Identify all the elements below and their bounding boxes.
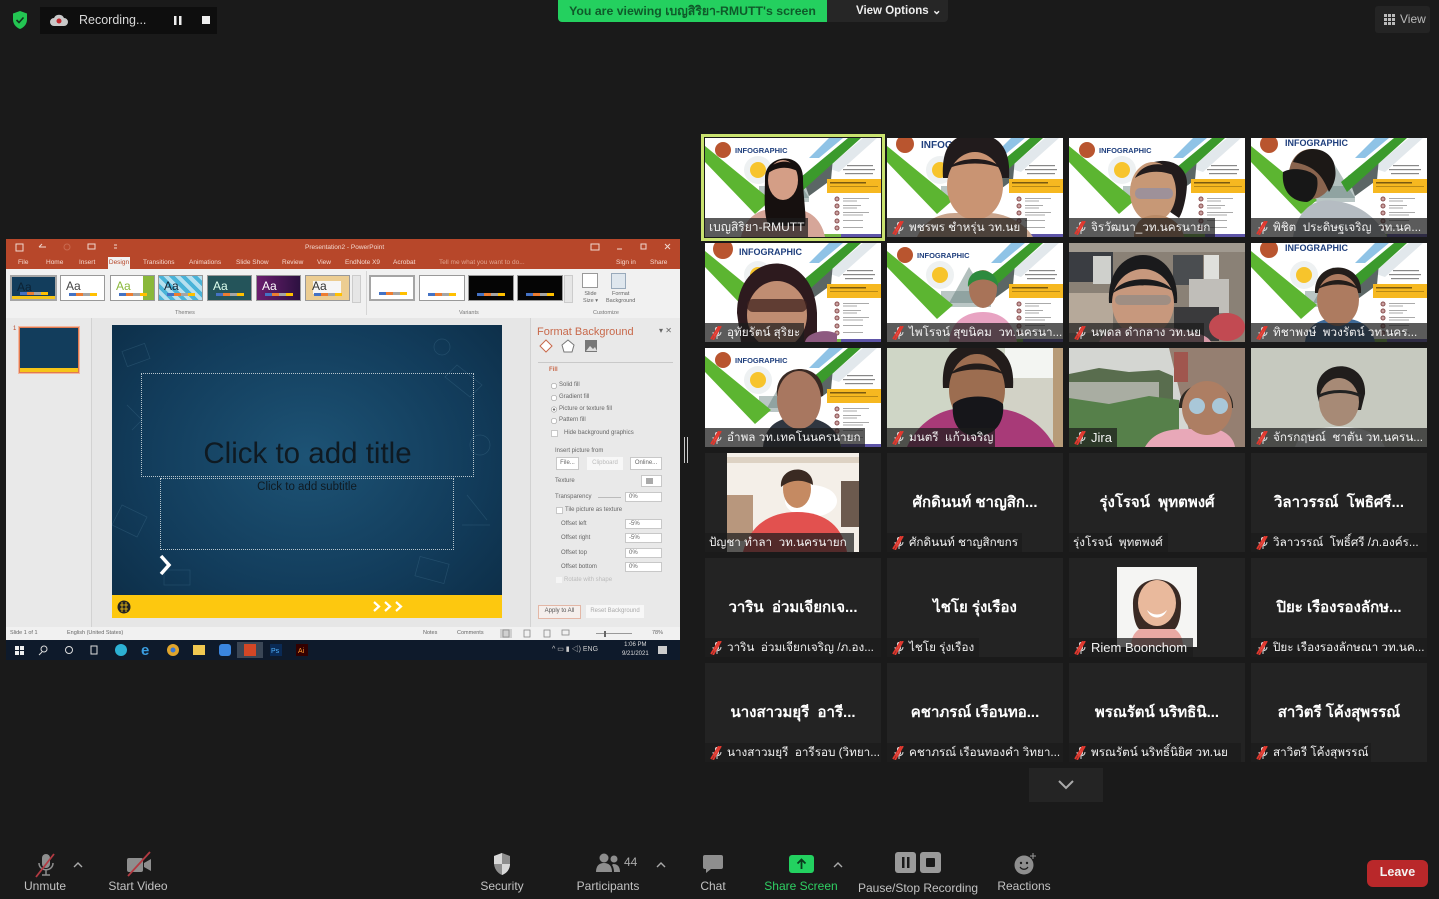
tab labels: Tell me what you want to do... xyxy=(439,259,525,266)
chevron up xyxy=(833,861,843,868)
participant name: วิลาวรรณ์ โพธิศรี... xyxy=(1274,494,1404,511)
active speaker highlight xyxy=(701,134,885,241)
recording label: Recording... xyxy=(79,13,146,27)
toolbar: start video xyxy=(100,848,180,896)
name tag: Jira xyxy=(1091,430,1112,445)
video feed xyxy=(887,138,1063,237)
status bar: Comments xyxy=(457,630,484,636)
insert picture label: Insert picture from xyxy=(555,448,603,454)
rotate with shape: Rotate with shape xyxy=(564,577,612,583)
insert file button: File... xyxy=(560,460,575,466)
theme thumbnail 1: Aa xyxy=(17,280,32,294)
video feed xyxy=(887,243,1063,342)
name tag xyxy=(705,638,881,657)
video tile: จิรวัฒนา xyxy=(1069,138,1245,237)
splitter handle xyxy=(684,437,688,463)
video feed: INFOGRAPHIC xyxy=(1285,138,1349,148)
language: English (United States) xyxy=(67,630,123,636)
name tag: เบญสิริยา-RMUTT xyxy=(709,220,804,234)
theme thumbnail 6 xyxy=(256,275,301,301)
offset rows: Offset top xyxy=(561,550,587,556)
participant name: คชาภรณ์ เรือนทอ... xyxy=(911,704,1039,721)
name tag xyxy=(705,533,854,552)
rotate checkbox xyxy=(556,577,562,583)
name tag xyxy=(887,638,979,657)
tab labels: Share xyxy=(650,259,667,266)
theme thumbnail 3: Aa xyxy=(116,279,131,293)
offset rows: -5% xyxy=(629,521,640,527)
chevron arrow xyxy=(160,554,172,576)
name tag: จักรกฤษณ์ ชาตัน วท.นครน... xyxy=(1273,431,1423,444)
offset rows: 0% xyxy=(629,550,638,556)
name tag: วิลาวรรณ์ โพธิ์ศรี /ภ.องค์ร... xyxy=(1273,536,1419,549)
name tag: ทิชาพงษ์ พวงรัตน์ วท.นคร... xyxy=(1273,326,1417,339)
participant name: นางสาวมยุรี อารี... xyxy=(730,704,856,721)
video tile: ทิชาพงษ์ xyxy=(1251,243,1427,342)
icon: format background xyxy=(611,273,626,289)
view options button xyxy=(827,0,948,22)
insert file button xyxy=(556,457,579,470)
clipboard button xyxy=(587,457,623,470)
tray clock: 1:06 PM xyxy=(624,642,647,648)
offset rows: Offset right xyxy=(561,535,590,541)
slide canvas xyxy=(112,325,502,618)
tab labels: Acrobat xyxy=(393,259,415,266)
hide background label: Hide background graphics xyxy=(564,430,634,436)
name tag: มนตรี แก้วเจริญ xyxy=(909,431,993,444)
reset background button xyxy=(586,605,644,618)
icon: shield xyxy=(492,852,512,876)
name tag: จิรวัฒนา_วท.นครนายก xyxy=(1091,221,1210,234)
offset rows xyxy=(561,519,662,572)
video feed xyxy=(727,453,859,552)
Variants label: Variants xyxy=(459,310,479,316)
viewing banner: You are viewing เบญสิริยา-RMUTT's screen xyxy=(569,4,816,18)
video tile: อุทัยรัตน์ xyxy=(705,243,881,342)
name tag: พชรพร ชำหรุ่น วท.นย xyxy=(909,221,1020,234)
video tile: พชรพร xyxy=(887,138,1063,237)
video tile: ศักดินนท์ xyxy=(887,453,1063,552)
fill options: Pattern fill xyxy=(559,417,586,423)
ribbon xyxy=(6,269,680,318)
video tile: เบญสิริยา xyxy=(705,138,881,237)
video tile: ไชโย xyxy=(887,558,1063,657)
reactions label: Reactions xyxy=(997,879,1051,893)
name tag: ปัญชา ทำลา วท.นครนายก xyxy=(709,536,847,549)
participant name: ปิยะ เรืองรองลักษ... xyxy=(1276,599,1402,616)
pane divider xyxy=(538,362,673,363)
leave button: Leave xyxy=(1380,865,1415,879)
toolbar: chat xyxy=(690,848,736,896)
top bar: security shield xyxy=(13,11,27,29)
name tag xyxy=(1069,743,1241,762)
video tile: สาวิตรี xyxy=(1251,663,1427,762)
zoom slider xyxy=(596,633,632,634)
video tile: Jira xyxy=(1069,348,1245,447)
participant name: ไชโย รุ่งเรือง xyxy=(933,599,1017,616)
video feed xyxy=(1295,366,1385,447)
variant thumbnail 1 xyxy=(369,275,415,301)
format background label xyxy=(606,291,635,304)
reset background button: Reset Background xyxy=(590,608,640,614)
notifications icon xyxy=(658,646,667,654)
name tag xyxy=(1251,428,1427,447)
video feed: INFOGRAPHIC xyxy=(735,146,788,155)
themes scroll control xyxy=(352,275,361,303)
active Design tab: Design xyxy=(109,259,129,266)
icon: pause and stop xyxy=(174,16,210,25)
slide size label: Slide xyxy=(584,291,597,297)
slide number: 1 xyxy=(13,326,16,332)
theme thumbnail 6: Aa xyxy=(262,279,277,293)
tab labels: Transitions xyxy=(143,259,175,266)
security label: Security xyxy=(480,879,524,893)
video feed: INFOGRAPHIC xyxy=(917,251,970,260)
video feed xyxy=(1069,243,1245,342)
name tag: อุทัยรัตน์ สุริยะ xyxy=(727,326,800,339)
tab labels: Review xyxy=(282,259,303,266)
view mode buttons xyxy=(500,629,570,638)
icon: chat bubble xyxy=(702,854,724,874)
icon: people xyxy=(595,853,621,873)
unmute label: Unmute xyxy=(24,879,66,893)
fill options: Picture or texture fill xyxy=(559,406,612,412)
name tag xyxy=(1251,533,1427,552)
Themes label: Themes xyxy=(175,310,195,316)
video tile: วาริน xyxy=(705,558,881,657)
texture label: Texture xyxy=(555,478,575,484)
slide count: Slide 1 of 1 xyxy=(10,630,38,636)
tab labels xyxy=(18,259,668,266)
zoom thumb xyxy=(604,631,606,637)
name tag: ศักดินนท์ ชาญสิกขกร xyxy=(909,536,1018,549)
icon: recording cloud xyxy=(50,14,68,26)
name tag xyxy=(887,743,1063,762)
video feed: INFOGRAPHIC xyxy=(739,247,803,257)
format background label: Format xyxy=(612,291,629,297)
name tag xyxy=(1251,323,1427,342)
recording status pill xyxy=(40,7,217,34)
transparency row: 0% xyxy=(629,494,638,500)
viewing banner xyxy=(558,0,827,22)
icon: share arrow xyxy=(789,855,814,873)
radio options xyxy=(551,383,557,424)
name tag: ไพโรจน์ สุขนิคม วท.นครนา... xyxy=(909,326,1062,339)
participant count: 44 xyxy=(624,855,637,869)
clipboard button: Clipboard xyxy=(592,460,618,466)
offset rows: Offset bottom xyxy=(561,564,597,570)
taskbar app icons xyxy=(115,642,308,658)
tile label: Tile picture as texture xyxy=(565,507,622,513)
recording label: Pause/Stop Recording xyxy=(858,881,978,895)
video feed xyxy=(705,348,881,447)
video tile: จักรกฤษณ์ xyxy=(1251,348,1427,447)
slide doodles xyxy=(112,338,490,586)
variant thumbnail 3 xyxy=(468,275,514,301)
name tag xyxy=(887,533,1022,552)
transparency row xyxy=(555,492,662,502)
icon: camera off xyxy=(126,851,152,877)
video feed xyxy=(705,243,881,342)
status bar xyxy=(6,627,680,640)
tray clock: 9/21/2021 xyxy=(622,651,649,657)
video tile: มนตรี xyxy=(887,348,1063,447)
participants label: Participants xyxy=(577,879,639,893)
video tile: นางสาวมยุรี xyxy=(705,663,881,762)
taskbar app icons: Ps xyxy=(271,648,280,655)
yellow footer band xyxy=(112,595,502,618)
offset rows: 0% xyxy=(629,564,638,570)
profile photo xyxy=(1117,567,1197,647)
slide size label xyxy=(583,291,598,304)
next page arrow xyxy=(1029,768,1103,802)
toolbar: pause and stop recording xyxy=(858,848,978,896)
tile checkbox xyxy=(556,507,563,514)
fill options: Solid fill xyxy=(559,382,580,388)
theme thumbnail 5 xyxy=(207,275,252,301)
toolbar: share screen xyxy=(760,848,850,896)
pane tab icons xyxy=(539,339,597,353)
ribbon divider xyxy=(366,271,367,315)
toolbar: security xyxy=(470,848,534,896)
name tag xyxy=(1069,218,1215,237)
video feed: INFOGRAPHIC xyxy=(735,356,788,365)
video tile: ไพโรจน์ xyxy=(887,243,1063,342)
video feed: INFOG xyxy=(921,140,953,151)
fill options xyxy=(559,382,612,423)
video tile: วิลาวรรณ์ xyxy=(1251,453,1427,552)
name tag: ไชโย รุ่งเรือง xyxy=(909,641,974,654)
name tag xyxy=(705,218,808,237)
view options button: View Options ⌄ xyxy=(856,5,941,17)
chat label: Chat xyxy=(700,879,726,893)
icon: smiley plus xyxy=(1012,852,1038,876)
theme thumbnail 5: Aa xyxy=(213,279,228,293)
format background pane xyxy=(530,318,681,627)
system tray: ^ ▭ ▮ ◁) ENG xyxy=(552,646,598,653)
icon: pause and stop xyxy=(895,852,942,873)
icon: grid xyxy=(1384,14,1395,25)
zoom percent: 78% xyxy=(652,630,663,636)
name tag xyxy=(1251,218,1427,237)
name tag xyxy=(887,218,1027,237)
theme thumbnail 1 xyxy=(10,275,57,301)
footer arrows xyxy=(373,601,402,612)
hide background checkbox xyxy=(551,430,558,437)
video feed xyxy=(1069,138,1245,237)
fill options: Gradient fill xyxy=(559,394,589,400)
video tile: Riem Boonchom xyxy=(1069,558,1245,657)
taskbar app icons: Ai xyxy=(298,648,305,655)
participant name: พรณรัตน์ นริทธินิ... xyxy=(1095,704,1219,721)
video feed xyxy=(705,138,881,237)
apply to all button xyxy=(538,605,581,619)
name tag: พิชิต ประดิษฐเจริญ วท.นค... xyxy=(1273,221,1421,234)
video feed xyxy=(1069,348,1245,447)
video feed xyxy=(1251,243,1427,342)
name tag xyxy=(705,743,881,762)
tab labels: File xyxy=(18,259,28,266)
participant name: วาริน อ่วมเจียกเจ... xyxy=(728,599,858,616)
name tag xyxy=(887,428,995,447)
name tag: สาวิตรี โค้งสุพรรณ์ xyxy=(1273,746,1368,759)
pane close icons: ▾ ✕ xyxy=(659,326,672,335)
name tag: ปิยะ เรืองรองลักษณา วท.นค... xyxy=(1273,641,1424,654)
slide size label: Size ▾ xyxy=(583,298,598,304)
name tag xyxy=(1069,323,1204,342)
name tag xyxy=(1069,428,1117,447)
fill heading: Fill xyxy=(549,367,558,373)
video tile: คชาภรณ์ xyxy=(887,663,1063,762)
video tile: พิชิต xyxy=(1251,138,1427,237)
name tag: วาริน อ่วมเจียกเจริญ /ภ.อง... xyxy=(727,641,874,654)
theme thumbnail 7: Aa xyxy=(312,279,327,293)
tab labels: Animations xyxy=(189,259,221,266)
offset rows: -5% xyxy=(629,535,640,541)
icon: slide size xyxy=(582,273,598,288)
tab labels: Sign in xyxy=(616,259,636,266)
texture picker xyxy=(641,475,662,487)
video feed xyxy=(887,348,1063,447)
active Design tab xyxy=(108,257,130,269)
participant name: สาวิตรี โค้งสุพรรณ์ xyxy=(1278,704,1400,721)
chevron up xyxy=(656,861,666,868)
icon: chevron down xyxy=(1058,780,1074,790)
theme thumbnail 2: Aa xyxy=(66,279,81,293)
tab labels: Home xyxy=(46,259,63,266)
name tag: นางสาวมยุรี อารีรอบ (วิทยา... xyxy=(727,746,880,759)
transparency row: Transparency xyxy=(555,494,591,500)
name tag: Riem Boonchom xyxy=(1091,640,1187,655)
name tag xyxy=(705,323,804,342)
view layout button: View xyxy=(1400,12,1426,26)
icon: footer globe xyxy=(118,600,130,614)
variant thumbnail 4 xyxy=(517,275,563,301)
icon: start and search xyxy=(15,646,98,656)
theme thumbnail 4: Aa xyxy=(164,279,179,293)
name tag: พรณรัตน์ นริทธิ์นิยิศ วท.นย xyxy=(1091,746,1228,759)
video tile: ปัญชา xyxy=(705,453,881,552)
name tag xyxy=(1069,533,1168,552)
view layout button xyxy=(1375,6,1430,33)
theme thumbnail 7 xyxy=(305,275,350,301)
subtitle text: Click to add subtitle xyxy=(257,481,357,493)
Windows taskbar xyxy=(6,640,680,660)
video feed: INFOGRAPHIC xyxy=(1099,146,1152,155)
toolbar: participants xyxy=(570,848,670,896)
slide thumbnail xyxy=(19,327,79,373)
themes gallery xyxy=(10,275,563,301)
video feed: INFOGRAPHIC xyxy=(1285,243,1349,253)
theme thumbnail 2 xyxy=(60,275,105,301)
name tag xyxy=(705,428,865,447)
video tile: อำพล xyxy=(705,348,881,447)
tray clock xyxy=(622,642,649,657)
name tag: รุ่งโรจน์ พุทตพงศ์ xyxy=(1073,536,1163,549)
panel: shared PowerPoint screen xyxy=(6,239,680,660)
tab labels: Slide Show xyxy=(236,259,269,266)
tab labels: View xyxy=(317,259,331,266)
offset rows: Offset left xyxy=(561,521,587,527)
window title: Presentation2 - PowerPoint xyxy=(305,244,384,251)
name tag: คชาภรณ์ เรือนทองคำ วิทยา... xyxy=(909,746,1060,759)
apply to all button: Apply to All xyxy=(545,608,574,614)
toolbar: unmute xyxy=(24,854,82,893)
theme thumbnail 3 xyxy=(110,275,155,301)
Customize label: Customize xyxy=(593,310,619,316)
pane heading: Format Background xyxy=(537,326,634,338)
video tile: รุ่งโรจน์ xyxy=(1069,453,1245,552)
subtitle placeholder xyxy=(160,478,454,550)
quick access and window icons xyxy=(16,244,670,252)
participant name: ศักดินนท์ ชาญสิก... xyxy=(912,494,1038,511)
name tag xyxy=(1251,638,1427,657)
video feed xyxy=(1251,138,1427,237)
start video label: Start Video xyxy=(108,879,168,893)
variant thumbnail 2 xyxy=(419,275,465,301)
online button: Online... xyxy=(635,460,657,466)
title placeholder xyxy=(141,373,474,477)
video tile: พรณรัตน์ xyxy=(1069,663,1245,762)
PowerPoint title bar xyxy=(6,239,680,269)
name tag: นพดล ดำกลาง วท.นย xyxy=(1091,326,1201,339)
leave button xyxy=(1367,860,1428,887)
thumbnail pane xyxy=(6,318,92,627)
video tile: ปิยะ xyxy=(1251,558,1427,657)
icon: muted microphone xyxy=(35,854,55,878)
tab labels: Insert xyxy=(79,259,95,266)
share screen label: Share Screen xyxy=(764,879,838,893)
name tag xyxy=(1069,638,1193,657)
variants scroll control xyxy=(564,275,573,303)
video tile: นพดล xyxy=(1069,243,1245,342)
toolbar: reactions xyxy=(995,848,1055,896)
format background label: Background xyxy=(606,298,635,304)
name tag: อำพล วท.เทคโนนครนายก xyxy=(727,431,861,444)
chevron up xyxy=(74,862,82,868)
title text: Click to add title xyxy=(203,437,412,470)
participant name: รุ่งโรจน์ พุทตพงศ์ xyxy=(1099,494,1215,511)
online button xyxy=(630,457,662,470)
name tag xyxy=(887,323,1063,342)
tab labels: EndNote X9 xyxy=(345,259,380,266)
name tag xyxy=(1251,743,1371,762)
theme thumbnail 4 xyxy=(158,275,203,301)
notes and comments: Notes xyxy=(423,630,437,636)
